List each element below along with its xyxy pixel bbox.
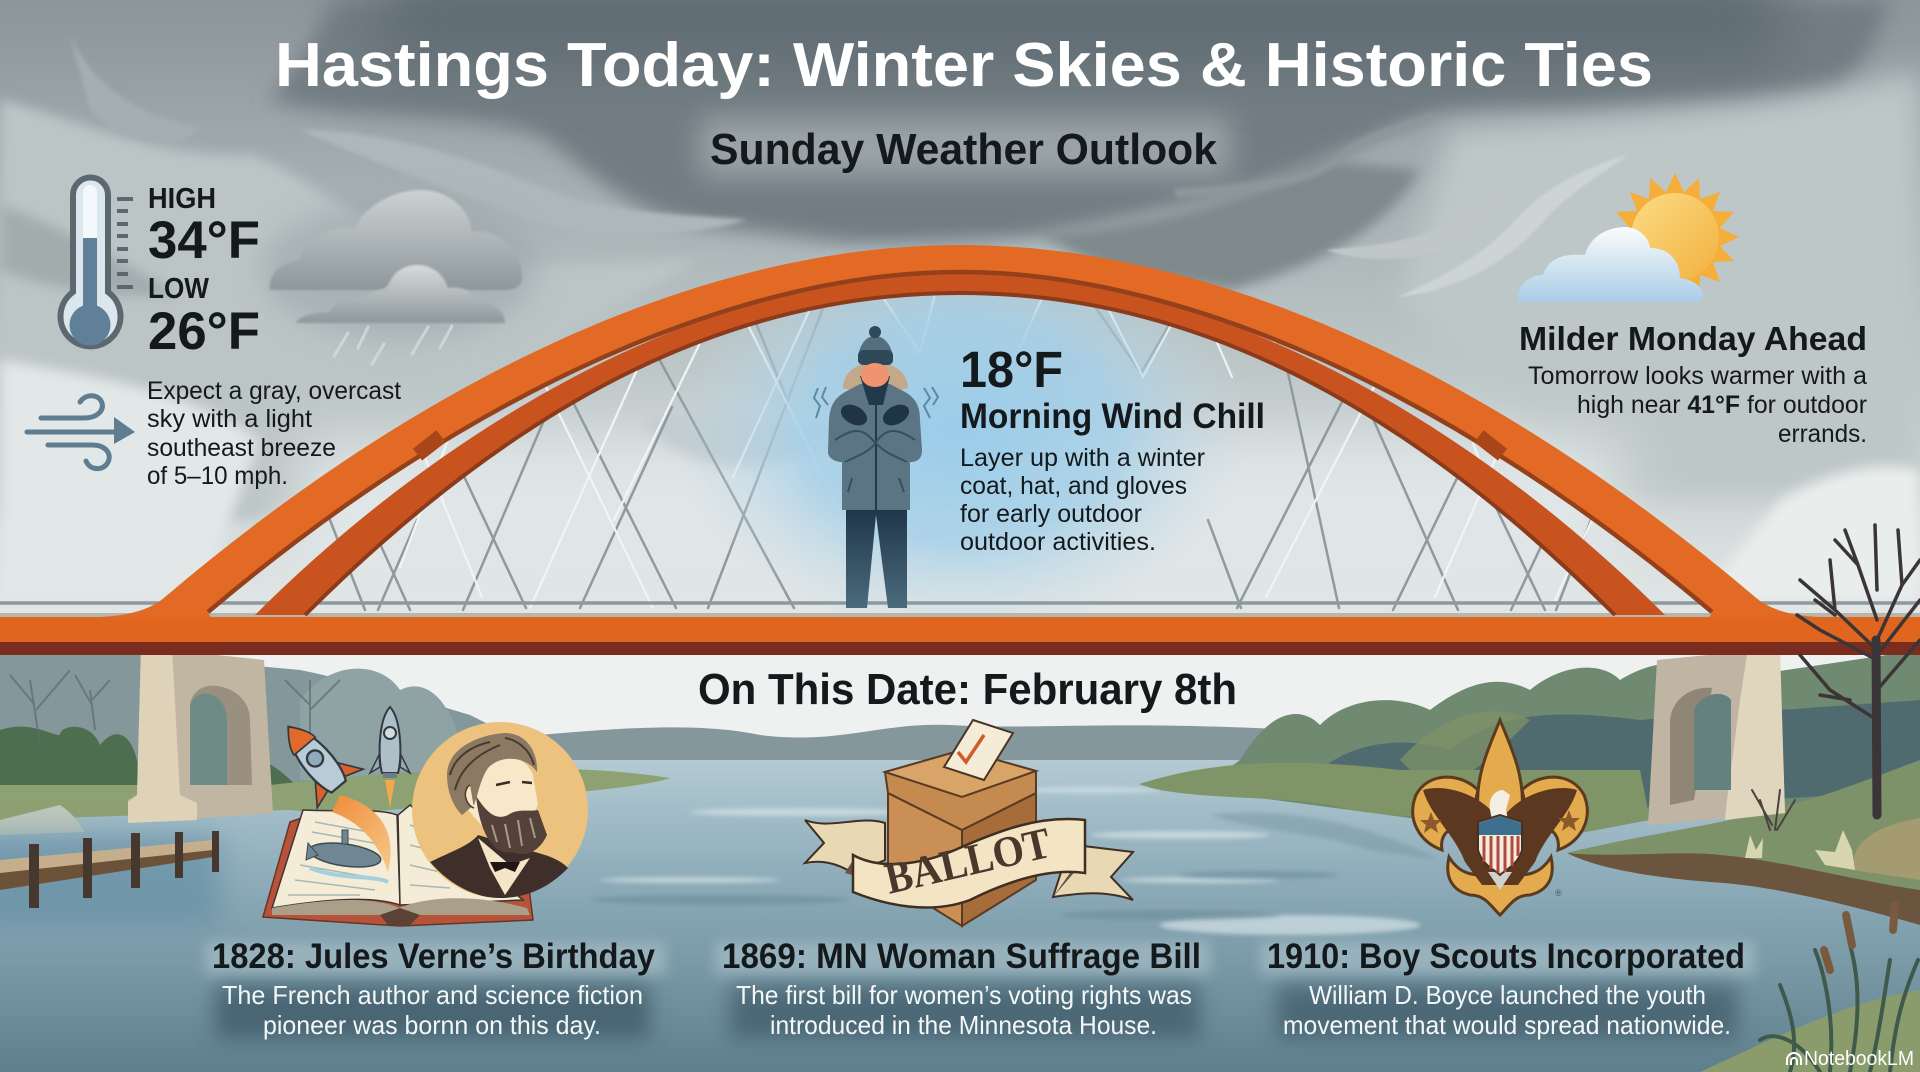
event description: The first bill for women’s voting rights was [736, 980, 1192, 1010]
submarine [306, 830, 388, 882]
event: boy scouts [1267, 937, 1745, 1040]
event description [1283, 980, 1731, 1040]
text: milder monday details [1528, 362, 1867, 448]
text: wind chill advice: outdoor activities. [960, 528, 1156, 556]
event heading: 1828: Jules Verne’s Birthday [212, 937, 655, 976]
landscape below bridge [0, 650, 1920, 1072]
dock [0, 831, 219, 908]
icon: boy scouts emblem [1413, 720, 1587, 915]
NotebookLM watermark: NotebookLM [1804, 1048, 1914, 1070]
event: Jules Verne [212, 937, 655, 1040]
event description [222, 980, 643, 1040]
text: milder monday details: Tomorrow looks warmer with a [1528, 362, 1867, 390]
event description: William D. Boyce launched the youth [1309, 980, 1706, 1010]
book [263, 805, 533, 926]
panel: milder monday [1518, 173, 1867, 448]
panel: sunday high and low [27, 178, 401, 490]
text: forecast summary [147, 377, 401, 490]
text: wind chill advice: for early outdoor [960, 500, 1142, 528]
icon: storm cloud [260, 190, 540, 364]
portrait medallion [412, 722, 588, 898]
bridge piers [128, 647, 1785, 825]
icon: wind [27, 396, 135, 469]
text: high label: HIGH [148, 183, 216, 215]
bridge cables and glow [330, 225, 1592, 635]
text: forecast summary: sky with a light [147, 405, 312, 433]
rocket: upright [370, 707, 410, 778]
event: suffrage bill [722, 937, 1201, 1040]
event heading: 1910: Boy Scouts Incorporated [1267, 937, 1745, 976]
text: forecast summary: of 5–10 mph. [147, 462, 288, 490]
text: wind chill advice: coat, hat, and gloves [960, 472, 1187, 500]
event description: The French author and science fiction [222, 980, 643, 1010]
text: low label: LOW [148, 273, 210, 305]
icon: sun behind cloud [1518, 173, 1739, 302]
text: forecast summary: Expect a gray, overcast [147, 377, 401, 405]
bridge: deck and arch [0, 245, 1920, 655]
rib connectors [413, 430, 1507, 461]
bare tree [1752, 525, 1920, 830]
arch: lower rib [255, 272, 1665, 615]
foreground reeds and bank [1700, 905, 1920, 1072]
event description [736, 980, 1192, 1040]
icon: thermometer [61, 178, 133, 346]
icon: shivering person [814, 326, 938, 608]
sky background [0, 0, 1920, 700]
text: high value: 34°F [148, 211, 260, 270]
registered mark: ® [1555, 888, 1562, 898]
heading: Sunday Weather Outlook: Sunday Weather Outlook [710, 125, 1218, 174]
text: wind chill advice [960, 444, 1205, 556]
rocket: tilted [266, 708, 363, 808]
text: milder monday details: high near 41°F for outdoor [1577, 391, 1867, 419]
background halos behind captions [205, 942, 1755, 1039]
ballot banner text: BALLOT [880, 818, 1055, 904]
pier: left [128, 647, 273, 823]
text: forecast summary: southeast breeze [147, 434, 336, 462]
pier: right [1648, 648, 1785, 825]
callout: wind chill person [814, 326, 1265, 608]
heading: on this date: On This Date: February 8th [698, 665, 1237, 714]
title: Hastings Today: Winter Skies & Historic Ties [275, 31, 1653, 100]
flames [332, 795, 391, 872]
text: milder monday heading: Milder Monday Ahead [1519, 320, 1867, 357]
icon: Jules Verne book, rockets and portrait [263, 707, 588, 926]
text: wind chill heading: Morning Wind Chill [960, 397, 1265, 436]
icon: ballot box with banner [805, 720, 1133, 926]
event description: introduced in the Minnesota House. [770, 1010, 1157, 1040]
text: wind chill temperature: 18°F [960, 341, 1063, 398]
arch: upper rib [100, 245, 1820, 635]
text: milder monday details: errands. [1778, 420, 1867, 448]
event description: pioneer was bornn on this day. [263, 1010, 601, 1040]
text: wind chill advice: Layer up with a winter [960, 444, 1205, 472]
event heading: 1869: MN Woman Suffrage Bill [722, 937, 1201, 976]
text: low value: 26°F [148, 302, 260, 361]
event description: movement that would spread nationwide. [1283, 1010, 1731, 1040]
